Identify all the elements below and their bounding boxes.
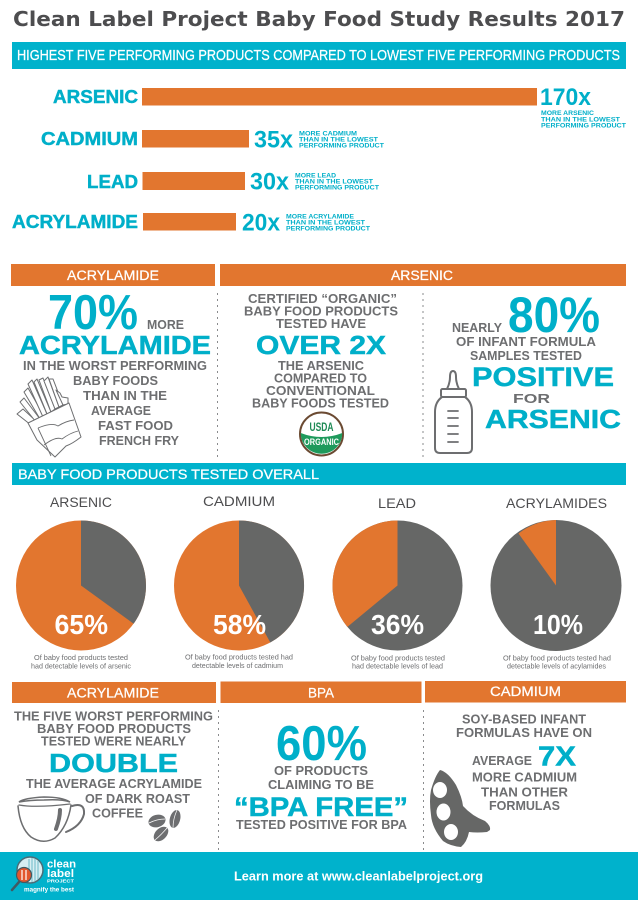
text block: double the acrylamide: DOUBLE [49,750,178,778]
stat: 70% more acrylamide: THAN IN THE [83,388,167,403]
panel: acrylamide coffee [12,682,216,845]
bar row: lead: THAN IN THE LOWEST [295,178,373,186]
panel heading: CADMIUM [490,684,561,699]
pie chart: arsenic 65%: 65% [54,609,108,640]
icon: soybean pod [430,770,490,847]
panel heading: ACRYLAMIDE [67,686,159,700]
stat: 7x more cadmium: FORMULAS HAVE ON [456,725,592,740]
stat: over 2x organic: CERTIFIED “ORGANIC” [248,291,397,306]
bar row: lead: PERFORMING PRODUCT [295,184,379,192]
pie chart: acrylamides 10%: ACRYLAMIDES [506,495,607,511]
pie chart: cadmium 58%: detectable levels of cadmium [192,663,283,670]
logo: clean label project: PROJECT [47,878,74,884]
bar row: arsenic: 170x [540,84,592,111]
logo: clean label project: clean [47,858,76,870]
stat: 70% more acrylamide: IN THE WORST PERFORMING [23,358,207,373]
panel heading: ARSENIC [391,268,453,283]
stat: 7x more cadmium: SOY-BASED INFANT [462,712,586,726]
bar row: cadmium: 35x [254,126,294,154]
pie chart: lead 36%: 36% [371,609,424,640]
dotted column dividers [218,293,424,850]
stat: over 2x organic: OVER 2X [256,332,386,360]
bar row: acrylamide [12,210,370,236]
stat: over 2x organic: BABY FOODS TESTED [252,396,389,410]
title: Clean Label Project Baby Food Study Results 2017 [13,7,625,31]
bar row: cadmium [41,126,384,154]
bar row: lead: MORE LEAD [295,172,336,180]
stat: 80% infant formula positive: POSITIVE [472,362,614,392]
bar row: cadmium: PERFORMING PRODUCT [299,142,384,150]
panel: cadmium soy [425,681,626,847]
text block: double the acrylamide: OF DARK ROAST [85,791,190,806]
stat: 80% infant formula positive: SAMPLES TESTED [470,348,582,363]
icon: baby bottle [435,371,472,453]
panel heading: BPA [308,686,334,700]
stat: over 2x organic: TESTED HAVE [276,316,366,331]
panel: BPA [220,682,422,832]
bar row: arsenic: ARSENIC [53,87,138,107]
pie chart: arsenic 65%: ARSENIC [50,494,112,510]
bar row: arsenic [53,84,626,130]
pie chart: cadmium 58%: Of baby food products tested had [185,654,293,662]
pie chart: arsenic 65% [16,494,146,670]
stat: 80% infant formula positive: NEARLY [452,321,503,335]
stat: 80% infant formula positive: FOR [513,391,551,406]
bar row: acrylamide: 20x [242,210,281,236]
bar row: acrylamide: PERFORMING PRODUCT [286,226,370,232]
stat: over 2x organic: COMPARED TO [274,370,367,386]
pie chart: arsenic 65%: Of baby food products tested [34,655,128,662]
stat: over 2x organic: THE ARSENIC [278,358,365,373]
panel: acrylamide 70 percent [11,264,215,457]
stat: 70% more acrylamide: BABY FOODS [73,373,158,388]
stat: 7x more cadmium: THAN OTHER [481,784,569,800]
call to action: Learn more at www.cleanlabelproject.org [234,868,483,884]
stat: 70% more acrylamide [19,286,211,448]
text block: double the acrylamide: THE AVERAGE ACRYLAMIDE [26,776,202,791]
pie chart: cadmium 58%: 58% [213,609,266,640]
stat: 7x more cadmium: 7X [538,740,576,772]
icon: coffee beans [147,808,183,845]
bar row: lead: LEAD [87,172,138,192]
bar row: cadmium: MORE CADMIUM [299,130,357,138]
stat: 80% infant formula positive: ARSENIC [485,404,621,434]
text block: double the acrylamide: BABY FOOD PRODUCTS [37,721,191,736]
pie chart: lead 36%: LEAD [378,495,416,511]
bar row: acrylamide: MORE ACRYLAMIDE [286,214,355,220]
logo: clean label project: magnify the best [24,886,75,894]
bar row: arsenic: MORE ARSENIC [541,110,594,117]
pie chart: acrylamides 10%: 10% [533,609,583,640]
icon: coffee cup [18,797,84,841]
pie chart: acrylamides 10%: Of baby food products tested had [503,656,611,662]
icon: french fries [17,377,81,457]
panel heading [11,264,215,286]
pie chart: lead 36%: had detectable levels of lead [352,664,443,670]
pie chart: cadmium 58%: CADMIUM [203,493,275,509]
panel heading [12,682,216,703]
bar row: acrylamide: THAN IN THE LOWEST [286,220,365,226]
stat: over 2x organic: CONVENTIONAL [266,383,375,398]
stat: 7x more cadmium: FORMULAS [489,798,560,813]
stat: 60% BPA free [234,717,408,832]
bar row: cadmium: CADMIUM [41,129,138,149]
panel: arsenic [220,264,626,456]
footer banner [0,852,638,900]
stat: 7x more cadmium: AVERAGE [472,753,532,768]
stat: 70% more acrylamide: FAST FOOD [98,418,173,433]
panel: highest vs lowest performing bar chart [12,42,626,236]
stat: 70% more acrylamide: 70% [48,286,138,340]
bar row: acrylamide: ACRYLAMIDE [12,212,138,232]
logo: clean label project: label [47,868,74,880]
pie chart: acrylamides 10% [490,495,622,670]
icon: USDA organic seal: USDA [310,420,334,434]
bar row: arsenic: THAN IN THE LOWEST [541,116,620,123]
logo: clean label project [12,857,76,894]
icon: USDA organic seal [300,412,343,456]
stat: 70% more acrylamide: MORE [147,318,184,332]
stat: 60% BPA free: OF PRODUCTS [274,763,368,778]
bar row: cadmium: THAN IN THE LOWEST [299,136,378,144]
pie chart: lead 36% [332,495,462,670]
pie chart: acrylamides 10%: detectable levels of acylamides [507,664,607,670]
stat: 80% infant formula positive: 80% [508,287,600,343]
stat: 70% more acrylamide: AVERAGE [91,403,151,418]
bar row: lead: 30x [250,168,290,196]
bar row: arsenic: PERFORMING PRODUCT [541,122,626,130]
panel heading [425,681,626,702]
panel heading [220,264,626,286]
stat: 70% more acrylamide: ACRYLAMIDE [19,332,211,360]
pie chart: lead 36%: Of baby food products tested [351,656,445,662]
text block: double the acrylamide [14,708,213,820]
panel heading: ACRYLAMIDE [67,268,159,283]
text block: double the acrylamide: TESTED WERE NEARLY [41,734,186,748]
stat: 60% BPA free: 60% [276,717,367,771]
panel heading [220,682,422,703]
stat: 80% infant formula positive [452,287,621,434]
heading banner [12,463,626,485]
stat: over 2x organic: BABY FOOD PRODUCTS [244,304,398,318]
icon: USDA organic seal: ORGANIC [304,437,339,448]
heading banner: BABY FOOD PRODUCTS TESTED OVERALL [18,466,319,482]
stat: over 2x organic [244,291,398,410]
heading banner [12,42,626,69]
text block: double the acrylamide: THE FIVE WORST PERFORMING [14,708,213,724]
panel: baby food products tested overall [12,463,626,670]
text block: double the acrylamide: COFFEE [92,806,143,820]
pie chart: cadmium 58% [174,493,304,670]
stat: 7x more cadmium [456,712,592,813]
stat: 60% BPA free: TESTED POSITIVE FOR BPA [236,817,408,832]
stat: 7x more cadmium: MORE CADMIUM [472,770,577,784]
stat: 70% more acrylamide: FRENCH FRY [99,433,179,448]
stat: 60% BPA free: “BPA FREE” [234,792,408,822]
stat: 60% BPA free: CLAIMING TO BE [268,777,374,792]
stat: 80% infant formula positive: OF INFANT FORMULA [456,334,597,349]
pie chart: arsenic 65%: had detectable levels of arsenic [31,664,132,670]
bar row: lead [87,168,379,196]
